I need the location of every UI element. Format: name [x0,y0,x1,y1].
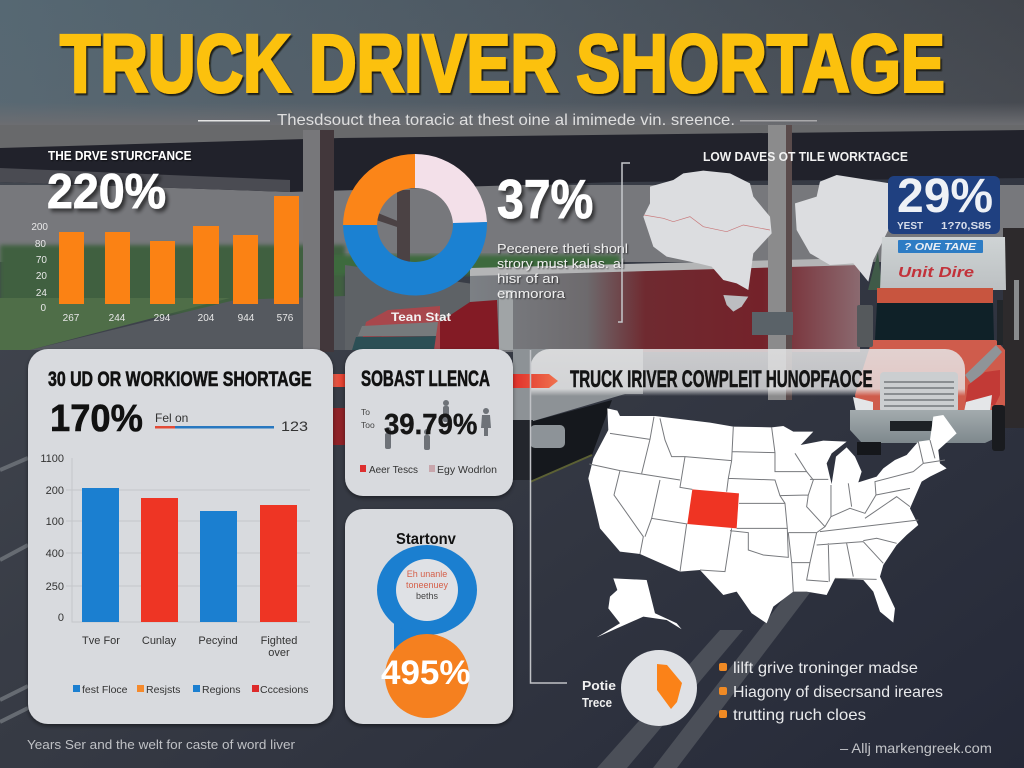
x labels: Tve For [82,635,120,647]
progress bar: 123 [281,418,308,434]
connector arrow [313,374,558,388]
panel: workforce region maps [643,150,908,312]
subtitle: Thesdsouct thea toracic at thest oine al imimede vin. sreence. [277,112,735,129]
legend [360,465,497,476]
pie chart callout [582,650,697,726]
pie [621,650,697,726]
highlighted state [687,489,739,528]
heading: Startonv [396,531,456,548]
bracket line [618,163,630,322]
big stat: 220% [47,165,166,219]
panel: sobast llenca: Too [361,420,375,430]
truck illustration [855,228,1024,428]
description: hisr of an [497,271,559,286]
y axis labels: 80 [35,239,46,250]
trailer [470,263,860,352]
legend: Egy Wodrlon [437,465,497,476]
y axis labels: 20 [36,271,47,282]
source credit: – Allj markengreek.com [840,740,992,756]
x axis labels: 294 [154,313,171,324]
stat: To [361,407,370,417]
legend: fest Floce [82,684,128,696]
mainland [588,408,957,623]
orange circle stat: 495% [381,654,471,692]
truck sign [898,240,983,253]
legend [73,684,308,696]
y axis: 200 [46,485,64,497]
windshield [875,303,994,340]
x axis labels: 944 [238,313,255,324]
x axis labels: 576 [277,313,294,324]
red visor [877,288,993,303]
panel: sobast llenca [345,349,513,496]
y axis labels: 24 [36,288,47,299]
blue ring: beths [416,591,439,601]
bullet list: trutting ruch cloes [733,707,866,724]
region map left [643,171,772,312]
description: Pecenere theti shonl [497,241,628,256]
legend: Resjsts [146,684,180,696]
panel: startony [345,509,513,724]
description: emmorora [497,286,566,301]
heading: TRUCK IRIVER COWPLEIT HUNOPFAOCE [570,367,873,393]
heading: THE DRVE STURCFANCE [48,148,191,163]
people silhouettes [385,400,491,450]
legend: Cccesions [260,684,308,696]
heading: LOW DAVES OT TILE WORKTAGCE [703,150,908,164]
blue ring: toneenuey [406,580,449,590]
truck sign: ? ONE TANE [904,242,976,253]
heading: SOBAST LLENCA [361,367,490,392]
y axis [40,453,64,624]
badge: 29 percent: YEST [897,221,923,232]
panel: workforce shortage [28,349,333,724]
donut chart [343,154,487,324]
mirrors [857,300,1003,347]
left truck cab [360,306,440,350]
orange circle stat [381,634,471,718]
y axis: 400 [46,548,64,560]
second pillar [768,125,786,400]
legend: Aeer Tescs [369,465,418,476]
bullet list: Hiagony of disecrsand ireares [733,684,943,701]
panel: drive surcharge bar chart [31,148,299,324]
ring text: Eh unanle [407,569,447,579]
x axis labels: 267 [63,313,80,324]
x labels [82,635,297,659]
cab body [880,237,1006,290]
title: TRUCK DRIVER SHORTAGE [60,18,945,109]
donut caption: Tean Stat [391,310,451,324]
y axis: 100 [46,516,64,528]
y axis: 0 [58,612,64,624]
y axis: 1100 [40,453,64,465]
y axis labels [31,222,48,314]
pie chart callout: Trece [582,696,612,710]
stat: 37 percent: 37% [497,168,593,230]
bars [59,196,299,304]
panel: sobast llenca: 39.79% [384,407,477,440]
description [497,241,628,301]
y axis: 250 [46,581,64,593]
x labels: Pecyind [198,635,238,647]
stat: 37 percent [497,168,628,301]
bullet list [719,660,943,724]
region map right [795,175,890,282]
Alaska [597,578,682,637]
x labels: Fighted [261,635,297,647]
badge: 29 percent: 1?70,S85 [941,221,991,232]
guide line [530,350,567,683]
truck front: grille and bumper [850,372,1005,455]
blue ring [377,545,477,650]
y axis labels: 0 [40,303,46,314]
big stat: 170% [50,396,143,439]
x axis labels [63,313,294,324]
y axis labels: 70 [36,255,47,266]
x axis labels: 204 [198,313,215,324]
panel: truck driver complete map banner [530,349,965,396]
x axis labels: 244 [109,313,126,324]
bars [82,488,297,622]
y axis labels: 200 [31,222,48,233]
legend: Regions [202,684,241,696]
x labels: over [268,647,290,659]
badge: 29 percent: 29% [897,170,993,223]
pillars [303,130,320,352]
bullet list: lilft grive troninger madse [733,660,918,677]
heading: 30 UD OR WORKIOWE SHORTAGE [48,367,312,391]
road marks [597,630,743,768]
progress bar: Fel on [155,411,188,425]
progress bar [155,411,308,434]
description: strory must kalas. al [497,256,624,271]
footer note: Years Ser and the welt for caste of word liver [27,737,296,752]
top title band [0,0,1024,125]
x labels: Cunlay [142,635,177,647]
truck brand: Unit Dire [898,264,974,281]
US map [588,408,957,637]
pie label: Potie [582,679,616,693]
